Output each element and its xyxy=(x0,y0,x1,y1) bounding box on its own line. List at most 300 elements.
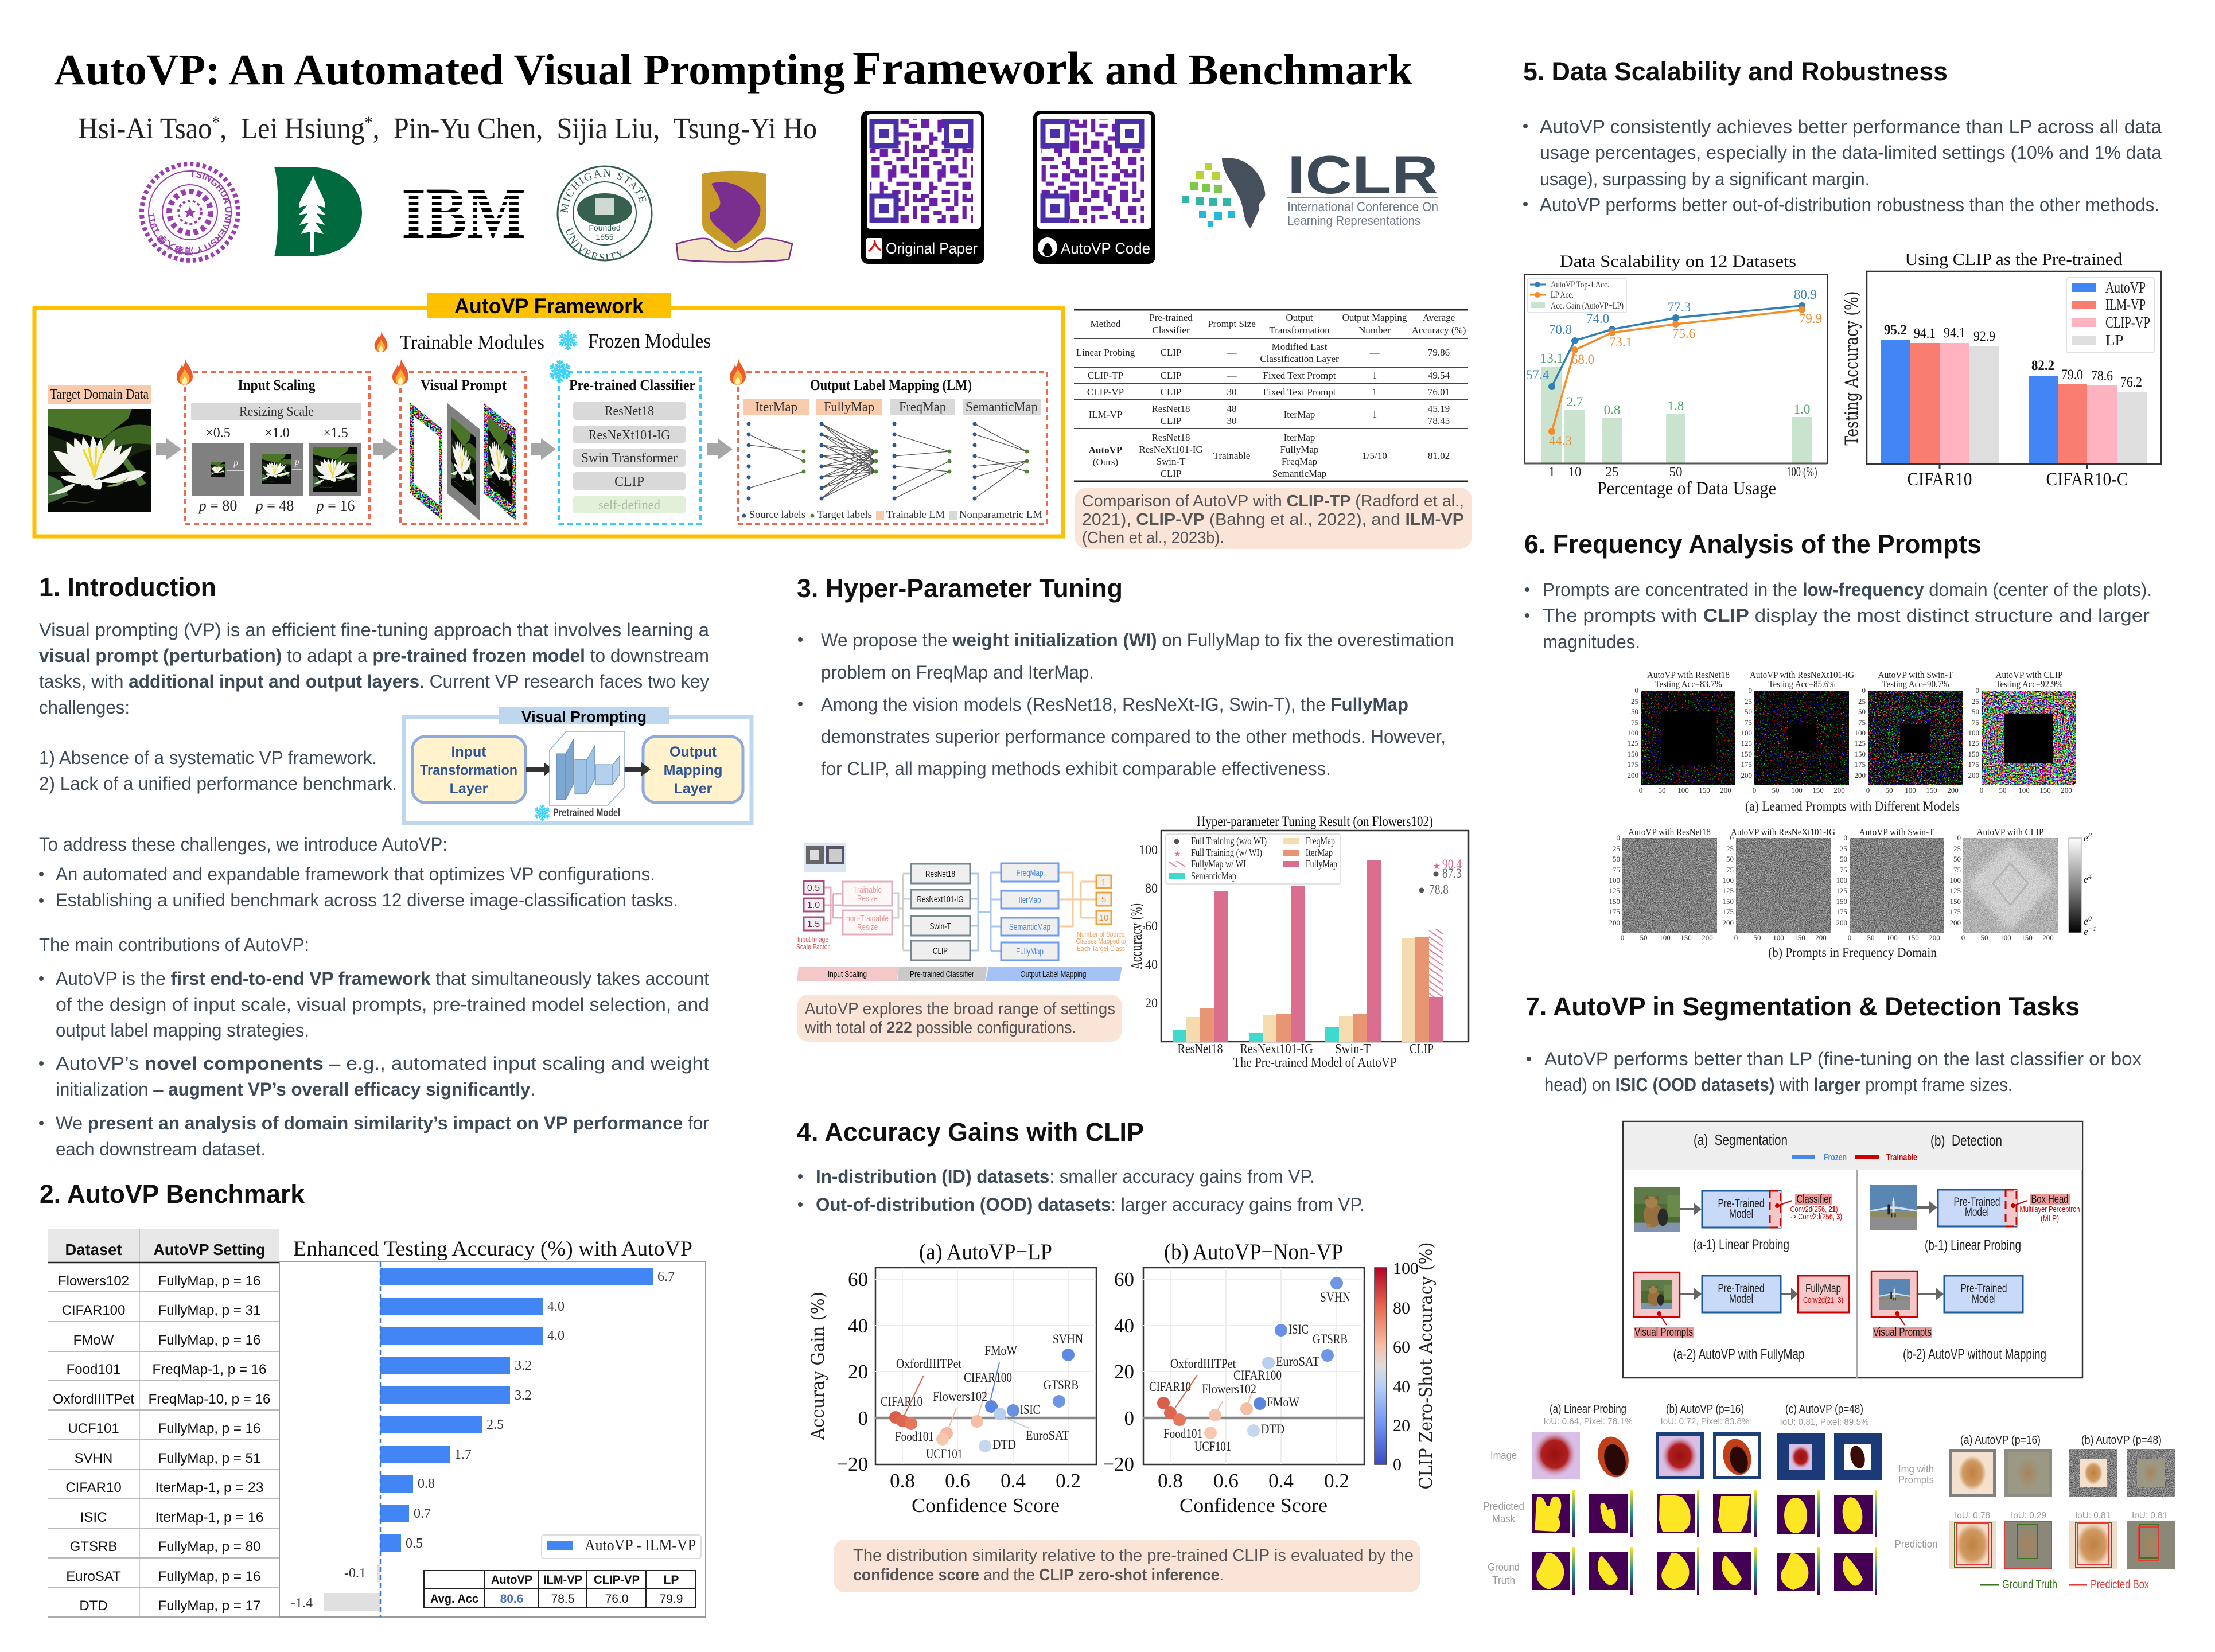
main contributions: each downstream dataset. xyxy=(56,1139,266,1159)
table: method comparison: Trainable xyxy=(1213,450,1250,461)
scatter chart: AutoVP minus Non-VP: OxfordIIITPet xyxy=(1170,1357,1236,1371)
figure: learned prompts: 75 xyxy=(1631,718,1638,727)
figure: prompts in frequency domain: 200 xyxy=(1722,918,1734,927)
section: segmentation and detection xyxy=(1483,992,2175,1595)
main contributions: The main contributions of AutoVP: xyxy=(39,934,309,955)
diagram: segmentation and detection setups: (b) Detection xyxy=(1930,1132,2002,1149)
figure: prompts in frequency domain: 50 xyxy=(1753,933,1761,942)
table: dataset settings: CIFAR100 xyxy=(62,1303,125,1318)
figure: learned prompts: 100 xyxy=(1854,728,1866,737)
scatter chart: AutoVP minus LP: UCF101 xyxy=(926,1447,963,1461)
intro paragraph: Visual prompting (VP) is an efficient fine-tuning approach that involves learning a xyxy=(39,620,710,640)
scatter chart: AutoVP minus LP: CIFAR10 xyxy=(881,1394,922,1409)
callout: comparison: 2021), CLIP-VP (Bahng et al., 2022), and ILM-VP xyxy=(1082,511,1464,529)
QR card: original paper: Original Paper xyxy=(886,240,978,257)
figure: segmentation results xyxy=(1483,1403,1882,1595)
figure: prompts in frequency domain: (b) Prompts in Frequency Domain xyxy=(1768,945,1937,960)
colorbar: CLIP zero-shot accuracy: 100 xyxy=(1393,1259,1419,1278)
colorbar: CLIP zero-shot accuracy xyxy=(1375,1242,1437,1489)
module: visual prompt xyxy=(392,359,525,524)
AutoVP summary xyxy=(39,834,678,910)
table: method comparison: Accuracy (%) xyxy=(1412,325,1466,336)
mapping boxes: FreqMap xyxy=(1017,868,1044,878)
figure: learned prompts: 75 xyxy=(1972,718,1979,727)
figure: detection results: IoU: 0.29 xyxy=(2011,1511,2046,1521)
figure: learned prompts: 200 xyxy=(1720,786,1731,794)
figure: detection results: (b) AutoVP (p=48) xyxy=(2081,1434,2162,1447)
figure: learned prompts: 150 xyxy=(1854,750,1866,758)
bar chart: enhanced testing accuracy: Enhanced Testing Accuracy (%) with AutoVP xyxy=(293,1237,692,1261)
chart: data scalability: Percentage of Data Usage xyxy=(1597,478,1776,499)
figure: learned prompts: (a) Learned Prompts with Different Models xyxy=(1745,799,1960,813)
figure: prompts in frequency domain: 75 xyxy=(1613,866,1620,874)
chart: data scalability: 75.6 xyxy=(1672,326,1695,341)
bar chart: enhanced testing accuracy: 6.7 xyxy=(657,1269,675,1284)
panel: a-2 AutoVP with FullyMap: Visual Prompts xyxy=(1634,1326,1693,1339)
bar chart: enhanced testing accuracy: -1.4 xyxy=(291,1596,313,1611)
legend: frozen and trainable: Trainable xyxy=(1886,1152,1917,1163)
main contributions: AutoVP’s novel components – e.g., automated input scaling and weight xyxy=(56,1053,709,1074)
module: pre-trained classifier: ResNet18 xyxy=(605,404,654,419)
logo: Michigan State University seal: 1855 xyxy=(595,232,614,241)
legend: trainable and frozen modules xyxy=(375,330,711,353)
colorbar: magnitude: e xyxy=(2084,926,2088,937)
mapping boxes xyxy=(1001,863,1058,960)
table: method comparison: AutoVP xyxy=(1089,445,1122,455)
module: input scaling: p = 16 xyxy=(316,497,355,514)
section: hyper-parameter tuning xyxy=(796,574,1469,1070)
scatter chart: AutoVP minus Non-VP: CIFAR10 xyxy=(1149,1380,1191,1394)
figure: learned prompts: AutoVP with CLIP xyxy=(1995,669,2063,680)
figure: prompts in frequency domain: 150 xyxy=(1908,933,1919,942)
table: method comparison: 76.01 xyxy=(1428,387,1450,398)
figure: prompts in frequency domain: 75 xyxy=(1726,866,1734,874)
chart: using CLIP as the pre-trained: 94.1 xyxy=(1914,326,1936,341)
figure: segmentation results: IoU: 0.72, Pixel: 83.8% xyxy=(1660,1417,1750,1427)
resize boxes: non-Trainable xyxy=(846,914,889,924)
table: method comparison: CLIP xyxy=(1161,347,1181,358)
logo: ICLR: Learning Representations xyxy=(1287,213,1420,228)
authors: Hsi-Ai Tsao xyxy=(78,112,222,145)
callout: 222 configurations: AutoVP explores the broad range of settings xyxy=(805,1000,1115,1018)
scatter chart: AutoVP minus Non-VP: (b) AutoVP−Non-VP xyxy=(1164,1240,1343,1264)
figure: learned prompts: 100 xyxy=(2018,786,2030,794)
callout: comparison: Comparison of AutoVP with CLIP-TP (Radford et al., xyxy=(1082,492,1464,511)
main contributions: of the design of input scale, visual prompts, pre-trained model selection, and xyxy=(56,994,709,1015)
figure: prompts in frequency domain: 0 xyxy=(1844,833,1847,842)
scatter chart: AutoVP minus Non-VP: Confidence Score xyxy=(1179,1494,1328,1517)
classifier boxes xyxy=(911,864,970,960)
table: method comparison: Classification Layer xyxy=(1260,353,1339,364)
mapping number boxes: 10 xyxy=(1099,913,1108,923)
segmentation bullets: AutoVP performs better than LP (fine-tuning on the last classifier or box xyxy=(1544,1049,2142,1069)
figure: learned prompts: 75 xyxy=(1745,718,1752,727)
mapping legend xyxy=(742,509,1042,521)
chart: data scalability: Data Scalability on 12 Datasets xyxy=(1560,252,1796,271)
module: pre-trained classifier: ResNeXt101-IG xyxy=(589,428,670,443)
scatter chart: AutoVP minus Non-VP: 60 xyxy=(1114,1268,1134,1291)
connectors xyxy=(824,872,1096,951)
figure: learned prompts: 100 xyxy=(1791,786,1803,794)
chart: data scalability: 25 xyxy=(1605,465,1619,479)
table: dataset settings: FullyMap, p = 16 xyxy=(158,1569,260,1584)
panel: b-1 linear probing xyxy=(1870,1185,2080,1253)
figure: learned prompts: 0 xyxy=(1635,686,1638,695)
figure: segmentation results: (b) AutoVP (p=16) xyxy=(1666,1403,1744,1416)
legend: trainable and frozen modules: Trainable Modules xyxy=(400,331,544,353)
bar chart: hyper-parameter tuning result: 40 xyxy=(1145,957,1158,972)
callout: distribution similarity: The distribution similarity relative to the pre-trained CLIP is evaluated by the xyxy=(853,1546,1414,1565)
tuning bullets: We propose the weight initialization (WI) on FullyMap to fix the overestimation xyxy=(821,630,1454,650)
stage banners xyxy=(797,967,1122,981)
colorbar: CLIP zero-shot accuracy: 80 xyxy=(1393,1299,1410,1318)
diagram: visual prompting: Layer xyxy=(450,781,488,797)
figure: prompts in frequency domain: 150 xyxy=(1836,897,1847,906)
scatter chart: AutoVP minus Non-VP: 0.6 xyxy=(1213,1470,1239,1492)
table: dataset settings: FMoW xyxy=(73,1332,114,1348)
prompted images xyxy=(1949,1449,2175,1497)
figure: learned prompts: AutoVP with ResNeXt101-IG xyxy=(1750,669,1854,680)
figure: learned prompts: 50 xyxy=(1885,786,1893,794)
scatter chart: AutoVP minus LP: FMoW xyxy=(984,1343,1017,1358)
mini table: average accuracy xyxy=(424,1571,696,1607)
table: method comparison: SemanticMap xyxy=(1272,468,1326,479)
figure: prompts in frequency domain: 50 xyxy=(1867,933,1875,942)
colorbar: magnitude: −1 xyxy=(2088,925,2096,933)
main contributions: AutoVP is the first end-to-end VP framework that simultaneously takes account xyxy=(56,968,709,989)
figure: prompts in frequency domain: 200 xyxy=(1949,918,1961,927)
authors: , Lei Hsiung xyxy=(220,112,365,145)
table: method comparison: — xyxy=(1227,347,1237,358)
table: method comparison: 78.45 xyxy=(1428,415,1450,426)
figure: learned prompts: 125 xyxy=(1627,739,1638,747)
figure: segmentation results: Mask xyxy=(1492,1513,1516,1525)
panel: b-2 AutoVP without mapping: Pre-Trained xyxy=(1961,1282,2007,1295)
bar chart: enhanced testing accuracy: 2.5 xyxy=(486,1417,504,1432)
AutoVP summary: An automated and expandable framework that optimizes VP configurations. xyxy=(56,864,655,885)
panel: b-1 linear probing: Multilayer Perceptron xyxy=(2019,1205,2080,1214)
icon: github xyxy=(1038,237,1057,257)
diagram: visual prompting: Mapping xyxy=(664,762,722,778)
legend: CLIP-VP xyxy=(2105,314,2150,331)
module: output label mapping: FullyMap xyxy=(824,400,874,415)
stage banners: Input Scaling xyxy=(828,969,867,979)
figure: prompts in frequency domain: 125 xyxy=(1722,886,1734,895)
table: method comparison: CLIP xyxy=(1161,415,1181,426)
figure: learned prompts: 50 xyxy=(1999,786,2007,794)
arrows between modules xyxy=(156,438,733,460)
heading: 5. Data Scalability and Robustness: 5. Data Scalability and Robustness xyxy=(1523,57,1948,86)
stage banners: Pre-trained Classifier xyxy=(910,969,974,979)
target domain data xyxy=(48,385,151,512)
table: method comparison: ILM-VP xyxy=(1089,409,1122,420)
figure: prompts in frequency domain: 100 xyxy=(1609,876,1620,885)
figure: segmentation results: Ground xyxy=(1488,1561,1520,1573)
table: method comparison: ResNet18 xyxy=(1151,403,1190,414)
chart: data scalability: 73.1 xyxy=(1609,335,1632,349)
colorbar: magnitude: 0 xyxy=(2088,914,2092,922)
intro paragraph xyxy=(39,620,710,718)
resize boxes xyxy=(843,882,892,934)
figure: learned prompts: Testing Acc=83.7% xyxy=(1655,679,1722,689)
panel: b-1 linear probing: (b-1) Linear Probing xyxy=(1925,1237,2021,1253)
table: method comparison: ResNeXt101-IG xyxy=(1139,444,1203,455)
figure: prompts in frequency domain: 125 xyxy=(1949,886,1961,895)
bar chart: enhanced testing accuracy: 0.7 xyxy=(414,1506,431,1521)
panel: a-1 linear probing: Classifier xyxy=(1797,1193,1832,1206)
legend: ground truth and predicted box: Ground Truth xyxy=(2002,1578,2057,1591)
table: method comparison xyxy=(1074,310,1468,481)
mapping boxes: IterMap xyxy=(1019,895,1041,905)
legend: frozen and trainable: Frozen xyxy=(1824,1152,1847,1163)
figure: learned prompts: 50 xyxy=(1772,786,1780,794)
mini table: average accuracy: 79.9 xyxy=(660,1592,683,1606)
segmentation bullets xyxy=(1527,1049,2142,1095)
table: method comparison: 81.02 xyxy=(1428,450,1450,461)
colorbar: CLIP zero-shot accuracy: 60 xyxy=(1393,1338,1410,1357)
figure: prompts in frequency domain: 175 xyxy=(1949,907,1961,916)
scale factor boxes: 1.0 xyxy=(807,901,820,910)
mini table: average accuracy: AutoVP xyxy=(491,1573,532,1587)
bar chart: hyper-parameter tuning result: 100 xyxy=(1139,843,1158,857)
mapping number caption xyxy=(1076,930,1126,953)
panel: AutoVP framework xyxy=(34,293,1063,536)
module: output label mapping: SemanticMap xyxy=(966,400,1038,415)
table: method comparison: 1/5/10 xyxy=(1362,450,1387,461)
figure: learned prompts: AutoVP with Swin-T xyxy=(1878,669,1953,680)
ground truth masks xyxy=(1532,1552,1873,1591)
figure: learned prompts: 150 xyxy=(1926,786,1937,794)
chart: using CLIP as the pre-trained: 78.6 xyxy=(2091,368,2113,384)
legend: ground truth and predicted box xyxy=(1980,1578,2149,1591)
legend: ILM-VP xyxy=(2105,296,2146,313)
table: method comparison: 30 xyxy=(1227,415,1237,426)
target domain data: Target Domain Data xyxy=(50,387,149,402)
figure: prompts in frequency domain: 0 xyxy=(1961,933,1965,942)
figure: learned prompts: 100 xyxy=(1968,728,1979,737)
table: method comparison: Pre-trained xyxy=(1149,312,1193,323)
figure: learned prompts: 150 xyxy=(1699,786,1710,794)
logo: Michigan State University seal: UNIVERSITY xyxy=(566,227,622,259)
chart: data scalability: 79.9 xyxy=(1799,311,1822,326)
table: method comparison: Number xyxy=(1358,325,1391,336)
table: dataset settings: Food101 xyxy=(67,1362,120,1377)
scalability bullets: usage percentages, especially in the data-limited settings (10% and 1% data xyxy=(1540,142,2162,163)
chart: data scalability: 74.0 xyxy=(1586,311,1609,326)
classifier boxes: CLIP xyxy=(933,946,948,956)
frequency bullets: The prompts with CLIP display the most distinct structure and larger xyxy=(1543,605,2150,626)
frequency bullets xyxy=(1525,579,2152,652)
chart: using CLIP as the pre-trained: CIFAR10 xyxy=(1907,469,1972,490)
figure: prompts in frequency domain: 0 xyxy=(1734,933,1738,942)
challenges list xyxy=(39,747,397,794)
chart: data scalability: 13.1 xyxy=(1540,351,1563,365)
table: method comparison: FullyMap xyxy=(1280,444,1319,455)
figure: prompts in frequency domain: 150 xyxy=(1722,897,1734,906)
module: input scaling: ×1.0 xyxy=(264,426,290,441)
figure: prompts in frequency domain: AutoVP with Swin-T xyxy=(1859,827,1934,837)
figure: learned prompts: 25 xyxy=(1631,697,1638,706)
module: output label mapping: IterMap xyxy=(755,400,797,415)
figure: prompts in frequency domain: 25 xyxy=(1840,844,1847,853)
scale factor caption: Input Image xyxy=(797,935,828,944)
resize boxes: Resize xyxy=(857,922,878,932)
table: method comparison: 30 xyxy=(1227,387,1237,398)
table: dataset settings: EuroSAT xyxy=(66,1569,121,1584)
figure: detection results xyxy=(1894,1434,2175,1591)
section: accuracy gains with CLIP xyxy=(797,1117,1437,1592)
callout: distribution similarity: confidence score and the CLIP zero-shot inference. xyxy=(853,1566,1224,1584)
colorbar: CLIP zero-shot accuracy: 40 xyxy=(1393,1377,1410,1396)
figure: prompts in frequency domain: 100 xyxy=(1773,933,1784,942)
bar chart: enhanced testing accuracy: 0.8 xyxy=(418,1476,435,1491)
chart: using CLIP as the pre-trained: 82.2 xyxy=(2031,358,2054,373)
diagram: visual prompting: Output xyxy=(669,744,717,760)
figure: learned prompts: 175 xyxy=(1968,760,1979,769)
figure: prompts in frequency domain: 125 xyxy=(1836,886,1847,895)
CLIP bullets: Out-of-distribution (OOD) datasets: larger accuracy gains from VP. xyxy=(816,1194,1365,1215)
panel: a-1 linear probing xyxy=(1634,1187,1842,1253)
panel: b-1 linear probing: Model xyxy=(1965,1206,1989,1219)
figure: learned prompts: 150 xyxy=(1627,750,1638,758)
bar chart: hyper-parameter tuning result: ResNet18 xyxy=(1177,1042,1223,1057)
figure: learned prompts: 200 xyxy=(1627,771,1638,780)
panel: a-2 AutoVP with FullyMap: Conv2d(21, 3) xyxy=(1803,1295,1843,1305)
chart: data scalability: 2.7 xyxy=(1567,395,1583,409)
scatter chart: AutoVP minus Non-VP xyxy=(1103,1240,1364,1517)
logo: Michigan State University seal: Founded xyxy=(589,223,621,232)
table: method comparison: 1 xyxy=(1372,370,1377,381)
table: method comparison: ResNet18 xyxy=(1151,432,1190,443)
figure: detection results: (a) AutoVP (p=16) xyxy=(1960,1434,2041,1447)
table: method comparison: Swin-T xyxy=(1157,456,1186,467)
scatter chart: AutoVP minus Non-VP: ISIC xyxy=(1288,1322,1309,1337)
legend: AutoVP Top-1 Acc. xyxy=(1551,280,1609,290)
authors: , Pin-Yu Chen, Sijia Liu, Tsung-Yi Ho xyxy=(373,112,817,145)
colorbar: CLIP zero-shot accuracy: 0 xyxy=(1393,1455,1402,1474)
module: pre-trained classifier: self-defined xyxy=(598,498,660,513)
logo: IBM: IBM xyxy=(402,173,525,254)
figure: learned prompts: 200 xyxy=(2061,786,2072,794)
colorbar: magnitude: 8 xyxy=(2088,831,2092,839)
scale factor caption xyxy=(796,935,830,951)
figure: prompts in frequency domain: 75 xyxy=(1953,866,1961,874)
mapping legend: Target labels xyxy=(817,509,872,521)
figure: prompts in frequency domain: 50 xyxy=(1953,855,1961,863)
callout: 222 configurations xyxy=(797,995,1122,1042)
table: method comparison: 49.54 xyxy=(1428,370,1450,381)
tuning bullets: for CLIP, all mapping methods exhibit comparable effectiveness. xyxy=(821,758,1331,779)
CLIP bullets: In-distribution (ID) datasets: smaller accuracy gains from VP. xyxy=(816,1166,1315,1187)
panel: b-2 AutoVP without mapping xyxy=(1871,1271,2046,1362)
callout: comparison xyxy=(1075,488,1472,549)
table: method comparison: 1 xyxy=(1372,387,1377,398)
frequency bullets: magnitudes. xyxy=(1543,632,1640,652)
table: method comparison: — xyxy=(1369,347,1380,358)
module: pre-trained classifier: Swin Transformer xyxy=(581,451,678,466)
scatter chart: AutoVP minus Non-VP: 20 xyxy=(1114,1361,1134,1383)
mini table: average accuracy: 80.6 xyxy=(500,1592,523,1606)
module: pre-trained classifier: CLIP xyxy=(614,474,644,489)
figure: learned prompts: 100 xyxy=(1627,728,1638,737)
figure: learned prompts: AutoVP with ResNet18 xyxy=(1647,669,1730,680)
panel: b-2 AutoVP without mapping: (b-2) AutoVP without Mapping xyxy=(1903,1346,2046,1362)
scatter chart: AutoVP minus Non-VP: EuroSAT xyxy=(1276,1354,1319,1369)
figure: learned prompts: Testing Acc=92.9% xyxy=(1995,679,2063,689)
scatter chart: AutoVP minus LP: ISIC xyxy=(1020,1402,1040,1417)
full training markers: ★ xyxy=(1432,862,1441,871)
scale factor boxes: 1.5 xyxy=(807,919,820,929)
figure: learned prompts: 200 xyxy=(1947,786,1959,794)
predicted masks xyxy=(1532,1494,1873,1534)
figure: prompts in frequency domain: 175 xyxy=(1836,907,1847,916)
scatter chart: AutoVP minus LP: 60 xyxy=(848,1268,868,1291)
scatter chart: AutoVP minus LP: OxfordIIITPet xyxy=(896,1357,962,1371)
colorbar: CLIP zero-shot accuracy: 20 xyxy=(1393,1416,1410,1435)
legend: Full Training (w/o WI) xyxy=(1191,835,1267,847)
scatter chart: AutoVP minus Non-VP: CIFAR100 xyxy=(1233,1368,1282,1382)
figure: learned prompts: 175 xyxy=(1627,760,1638,769)
mini table: average accuracy: 78.5 xyxy=(551,1592,574,1606)
logo: Dartmouth xyxy=(274,167,362,256)
table: dataset settings: Flowers102 xyxy=(58,1273,129,1289)
figure: learned prompts: 125 xyxy=(1741,739,1752,747)
table: dataset settings: SVHN xyxy=(75,1451,112,1466)
chart: using CLIP as the pre-trained: 94.1 xyxy=(1944,325,1965,341)
table: method comparison: 48 xyxy=(1227,403,1237,414)
bar chart: hyper-parameter tuning result: 20 xyxy=(1145,996,1158,1010)
legend: Full Training (w/ WI) xyxy=(1191,847,1262,859)
module: input scaling: Input Scaling xyxy=(238,377,316,393)
figure: prompts in frequency domain: 100 xyxy=(1659,933,1671,942)
scalability bullets: AutoVP performs better out-of-distribution robustness than the other methods. xyxy=(1540,194,2159,215)
full training markers: 87.3 xyxy=(1442,866,1462,880)
tuning bullets: demonstrates superior performance compared to the other methods. However, xyxy=(821,726,1446,747)
table: dataset settings: CIFAR10 xyxy=(65,1480,122,1495)
figure: learned prompts: 175 xyxy=(1741,760,1752,769)
classifier boxes: ResNext101-IG xyxy=(917,895,964,905)
legend: SemanticMap xyxy=(1191,870,1236,882)
chart: using CLIP as the pre-trained: Testing Accuracy (%) xyxy=(1842,291,1862,445)
figure: prompts in frequency domain: 125 xyxy=(1609,886,1620,895)
panel: b-1 linear probing: (MLP) xyxy=(2041,1214,2059,1224)
table: method comparison: CLIP xyxy=(1161,387,1181,398)
scatter chart: AutoVP minus Non-VP: 0.2 xyxy=(1324,1470,1349,1492)
mini table: average accuracy: CLIP-VP xyxy=(594,1573,640,1587)
figure: prompts in frequency domain: 0 xyxy=(1730,833,1734,842)
tuning bullets: problem on FreqMap and IterMap. xyxy=(821,662,1094,683)
bar chart: hyper-parameter tuning result: Hyper-parameter Tuning Result (on Flowers102) xyxy=(1197,814,1433,829)
callout: comparison: (Chen et al., 2023b). xyxy=(1082,529,1224,547)
scatter chart: AutoVP minus Non-VP: Flowers102 xyxy=(1202,1382,1256,1396)
scatter chart: AutoVP minus Non-VP: SVHN xyxy=(1320,1290,1350,1304)
logo: ICLR: ICLR xyxy=(1287,145,1438,205)
mini table: average accuracy: ILM-VP xyxy=(543,1573,582,1587)
figure: prompts in frequency domain: 200 xyxy=(1836,918,1847,927)
title: AutoVP: An Automated Visual Prompting xyxy=(54,46,845,94)
figure: detection results: Prompts xyxy=(1898,1474,1934,1486)
panel: a-1 linear probing: (a-1) Linear Probing xyxy=(1693,1237,1789,1253)
mini table: average accuracy: Avg. Acc xyxy=(430,1592,478,1606)
figure: learned prompts: 0 xyxy=(1753,786,1756,794)
main contributions: output label mapping strategies. xyxy=(56,1020,309,1041)
legend: ground truth and predicted box: Predicted Box xyxy=(2091,1578,2149,1591)
heading: 4. Accuracy Gains with CLIP: 4. Accuracy Gains with CLIP xyxy=(797,1117,1144,1147)
scalability bullets: usage), surpassing by a significant margin. xyxy=(1540,169,1870,189)
scatter chart: AutoVP minus Non-VP: Food101 xyxy=(1163,1427,1202,1441)
scatter chart: AutoVP minus Non-VP: 0.8 xyxy=(1158,1470,1183,1492)
mapping legend: Trainable LM xyxy=(886,509,945,521)
